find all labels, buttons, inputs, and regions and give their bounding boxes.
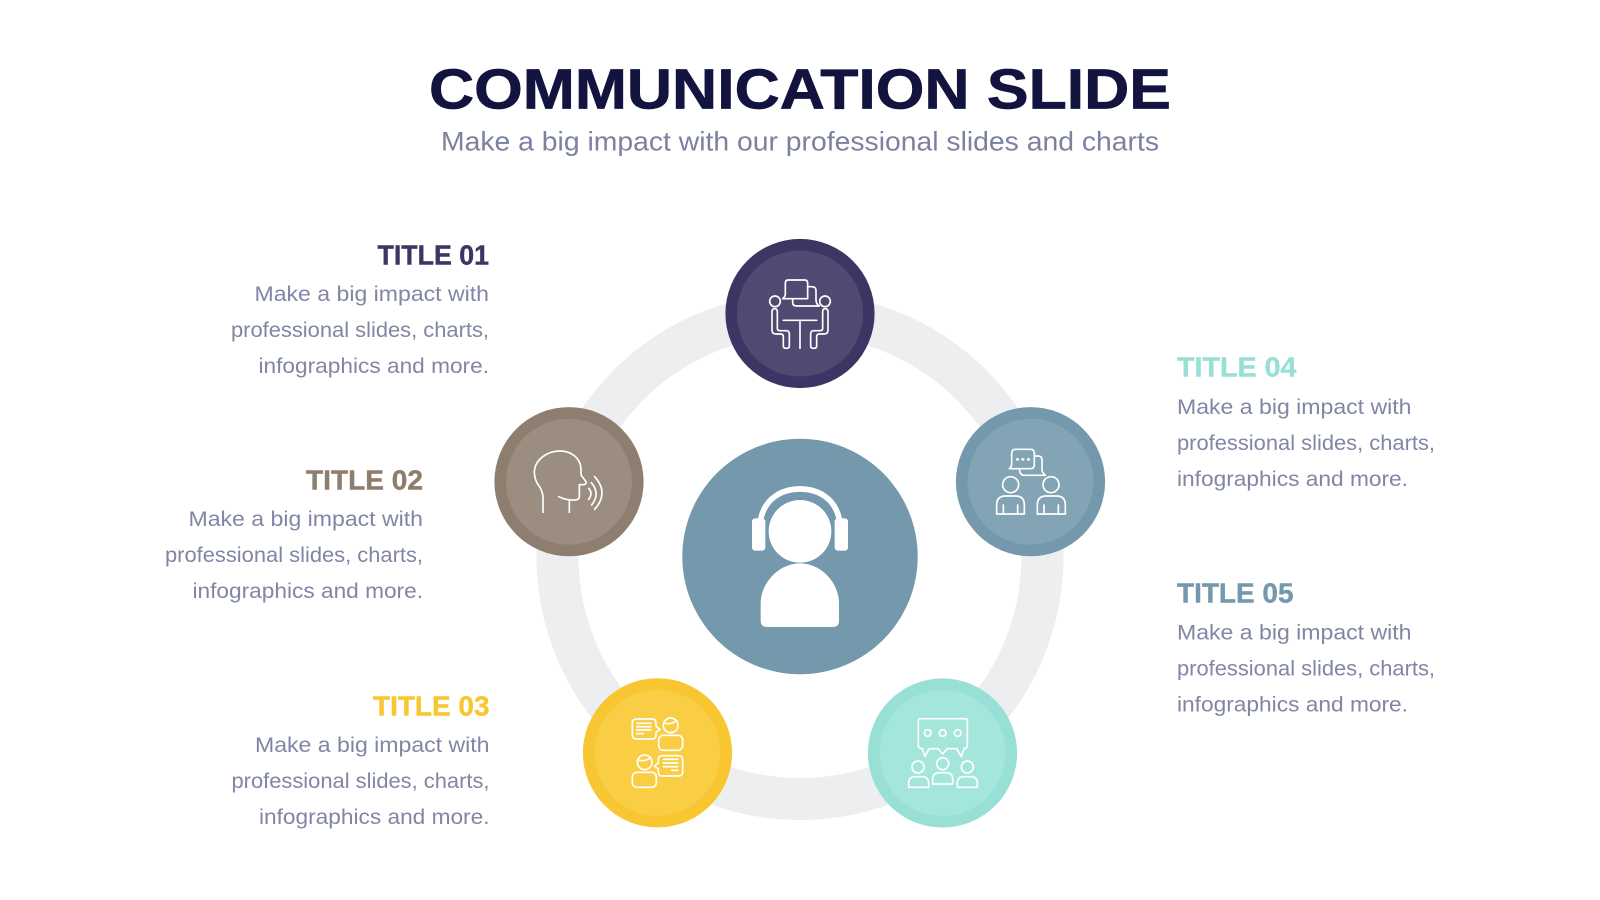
text block: title 01 [231, 239, 489, 378]
text block: title 03: professional slides, charts, [232, 769, 490, 793]
text block: title 04: TITLE 04 [1177, 352, 1297, 383]
icon: person with headset [752, 489, 848, 627]
text block: title 05: TITLE 05 [1177, 577, 1294, 608]
text block: title 05 [1177, 577, 1435, 716]
text block: title 03: TITLE 03 [373, 690, 490, 721]
text block: title 05: professional slides, charts, [1177, 656, 1435, 680]
text block: title 02 [165, 464, 423, 603]
text block: title 03: infographics and more. [259, 805, 490, 829]
subtitle: Make a big impact with our professional slides and charts [441, 126, 1159, 156]
text block: title 02: infographics and more. [192, 579, 423, 603]
text block: title 02: Make a big impact with [188, 507, 423, 531]
text block: title 04: infographics and more. [1177, 467, 1408, 491]
text block: title 02: professional slides, charts, [165, 543, 423, 567]
icon: two people at table [770, 280, 830, 348]
text block: title 01: professional slides, charts, [231, 318, 489, 342]
node 01: meeting at table [725, 239, 875, 388]
node 03: conversation [583, 678, 732, 827]
title: COMMUNICATION SLIDE [429, 58, 1171, 122]
text block: title 01: Make a big impact with [254, 282, 489, 306]
text block: title 03 [232, 690, 490, 829]
background ring [558, 314, 1042, 799]
text block: title 04: Make a big impact with [1177, 395, 1412, 419]
node 04: two people chat [956, 407, 1105, 556]
text block: title 04: professional slides, charts, [1177, 431, 1435, 455]
icon: speaking head [534, 451, 602, 512]
text block: title 01: infographics and more. [258, 354, 489, 378]
text block: title 02: TITLE 02 [306, 464, 423, 495]
icon: two people with speech bubbles [997, 449, 1065, 514]
node 05: group discussion [868, 678, 1017, 828]
text block: title 04 [1177, 352, 1435, 491]
node 02: speaking head [494, 407, 644, 556]
text block: title 05: infographics and more. [1177, 692, 1408, 716]
icon: group under speech bubble [909, 719, 977, 787]
text block: title 01: TITLE 01 [378, 239, 489, 270]
text block: title 05: Make a big impact with [1177, 620, 1412, 644]
icon: two people exchanging messages [632, 718, 683, 787]
text block: title 03: Make a big impact with [255, 733, 490, 757]
central circle with headset person icon [682, 439, 918, 674]
